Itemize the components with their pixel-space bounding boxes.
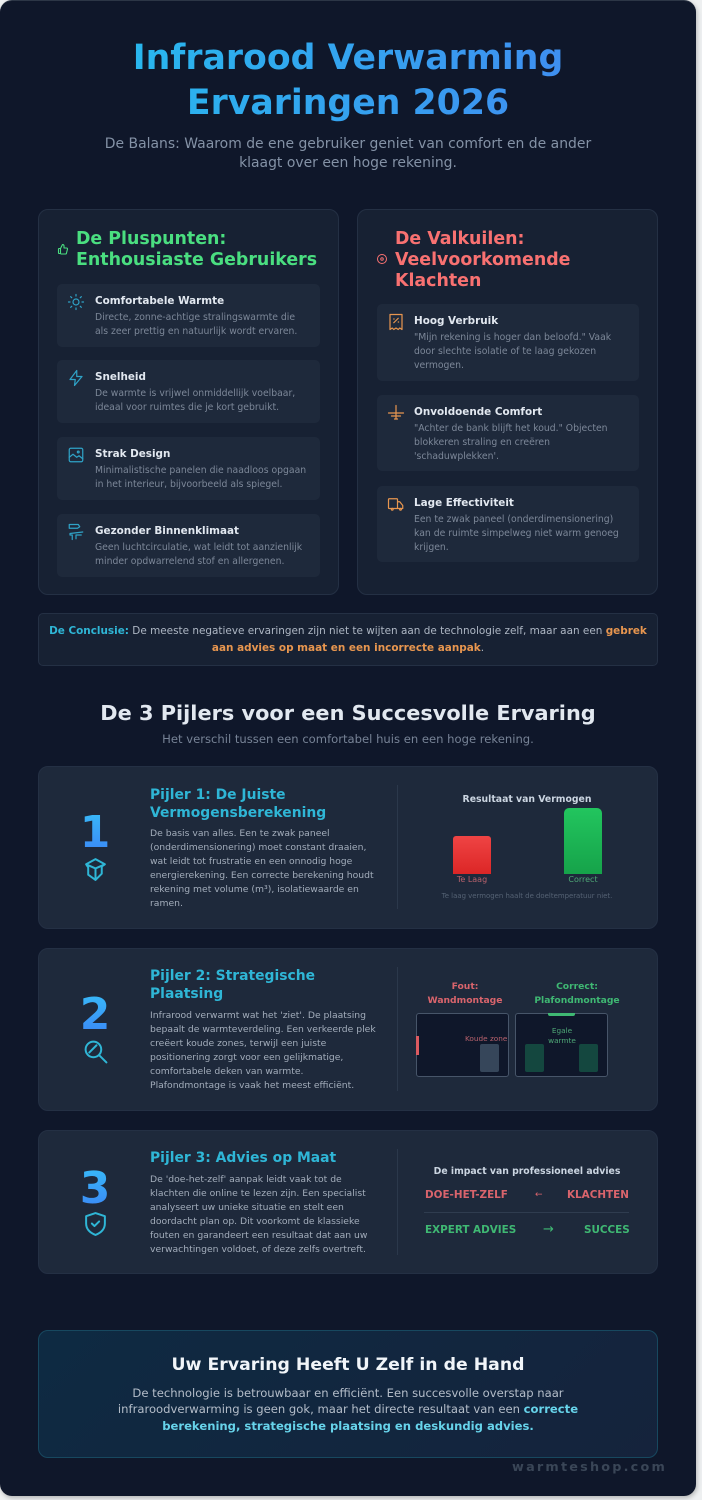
item text: "Achter de bank blijft het koud." Objecten xyxy=(414,423,608,434)
item text xyxy=(95,388,295,413)
item title: Lage Effectiviteit xyxy=(414,497,514,509)
diagram: impact xyxy=(424,1166,630,1237)
chart caption: Te laag vermogen haalt de doeltemperatuur niet. xyxy=(442,892,612,900)
closing text: De technologie is betrouwbaar en efficiënt. Een succesvolle overstap naar xyxy=(132,1386,564,1400)
heading: valkuilen xyxy=(395,229,570,291)
pillar 1 text: energierekening. Een correcte berekening houdt xyxy=(150,870,374,881)
heading: valkuilen: Veelvoorkomende xyxy=(395,250,570,270)
item text: 'schaduwplekken'. xyxy=(414,451,499,462)
heater on ceiling xyxy=(548,1013,575,1016)
chart title: Resultaat van Vermogen xyxy=(463,794,591,805)
row: doe-het-zelf: DOE-HET-ZELF xyxy=(425,1189,508,1201)
pillar 2 text: Infrarood verwarmt wat het 'ziet'. De plaatsing xyxy=(150,1010,366,1021)
pillar 2 text: creëert koude zones, terwijl een juiste xyxy=(150,1038,326,1049)
pillar 1 title xyxy=(150,787,326,821)
item text: Een te zwak paneel (onderdimensionering) xyxy=(414,514,613,525)
item text: Geen luchtcirculatie, wat leidt tot aanzienlijk xyxy=(95,542,302,553)
furniture left xyxy=(525,1044,544,1072)
furniture xyxy=(480,1044,499,1072)
row: expert advies: EXPERT ADVIES xyxy=(425,1224,516,1236)
closing panel xyxy=(38,1330,658,1458)
item text xyxy=(414,514,619,553)
item text xyxy=(414,423,608,462)
pillar 3 title: Pijler 3: Advies op Maat xyxy=(150,1150,336,1166)
item: onvoldoende comfort xyxy=(377,395,639,471)
closing text: berekening, strategische plaatsing en deskundig advies. xyxy=(162,1419,534,1433)
icon: receipt xyxy=(389,314,403,330)
pillar 2 text: bepaalt de warmteverdeling. Een verkeerde plek xyxy=(150,1024,376,1035)
closing title: Uw Ervaring Heeft U Zelf in de Hand xyxy=(171,1355,524,1375)
pillar 1 title: Pijler 1: De Juiste xyxy=(150,787,286,803)
pillar 3 xyxy=(38,1130,658,1274)
pillar 1 xyxy=(38,766,658,929)
diagram: plaatsing xyxy=(416,981,620,1077)
item text xyxy=(414,332,611,371)
pillar 1 text: wat leidt tot frustratie en een onnodig hoge xyxy=(150,856,352,867)
title: Ervaringen 2026 xyxy=(187,83,509,123)
icon: lightning xyxy=(69,370,83,386)
item: strak design xyxy=(57,437,320,500)
pillar 3 text: fouten en garandeert een resultaat dat aan uw xyxy=(150,1230,367,1241)
label: egale warmte: warmte xyxy=(548,1036,576,1045)
item text xyxy=(95,542,302,567)
icon: thumbs up xyxy=(58,244,68,254)
label: fout: Fout: xyxy=(452,981,478,992)
item title: Comfortabele Warmte xyxy=(95,295,224,307)
item text: ideaal voor ruimtes die je kort gebruikt. xyxy=(95,402,279,413)
pillar 1 text: (onderdimensionering) moet constant draaien, xyxy=(150,842,366,853)
heading: pluspunten: De Pluspunten: xyxy=(76,229,226,249)
icon: shield xyxy=(85,1212,106,1236)
pillar 1 text xyxy=(150,828,374,909)
icon: picture xyxy=(68,448,84,462)
item text: in het interieur, bijvoorbeeld als spiegel. xyxy=(95,479,282,490)
pillar 3 text: doordacht plan op. Dit voorkomt de klassieke xyxy=(150,1216,360,1227)
item text: door slechte isolatie of te laag gekozen xyxy=(414,346,596,357)
subtitle xyxy=(105,136,592,170)
label: correct: Plafondmontage xyxy=(534,995,620,1006)
item text: blokkeren straling en creëren xyxy=(414,437,550,448)
pillar 3 text: De 'doe-het-zelf' aanpak leidt vaak tot de xyxy=(150,1174,342,1185)
chart: resultaat van vermogen xyxy=(442,794,612,900)
title xyxy=(48,36,648,126)
item: lage effectiviteit xyxy=(377,486,639,562)
pillar 1 text: rekening met volume (m³), isolatiewaarde en xyxy=(150,884,359,895)
item text: krijgen. xyxy=(414,542,449,553)
closing text xyxy=(118,1386,578,1433)
pillar 1 text: De basis van alles. Een te zwak paneel xyxy=(150,828,330,839)
pillar 2 title xyxy=(150,968,315,1002)
bar: te laag xyxy=(453,836,491,874)
pillar 2 text: Plafondmontage is vaak het meest efficiënt. xyxy=(150,1080,354,1091)
item text: als zeer prettig en natuurlijk wordt ervaren. xyxy=(95,326,297,337)
item: hoog verbruik xyxy=(377,304,639,381)
pillar 2 title: Plaatsing xyxy=(150,986,223,1002)
pillar 1 text: ramen. xyxy=(150,898,183,909)
item title: Hoog Verbruik xyxy=(414,315,498,327)
icon: grounded heat xyxy=(388,404,404,420)
room: wandmontage xyxy=(416,1013,509,1077)
number 3 xyxy=(65,1164,125,1214)
label: correct: Correct xyxy=(568,875,598,884)
heading: valkuilen: De Valkuilen: xyxy=(395,229,524,249)
callout: conclusie xyxy=(38,613,658,666)
icon: search xyxy=(84,1040,108,1064)
subtitle: De Balans: Waarom de ene gebruiker geniet van comfort en de ander xyxy=(105,136,591,152)
pillar 2 xyxy=(38,948,658,1111)
item: comfortabele warmte xyxy=(57,284,320,347)
item title: Strak Design xyxy=(95,448,170,460)
item text: minder opdwarrelend stof en allergenen. xyxy=(95,556,284,567)
panel: pluspunten xyxy=(38,209,339,595)
item text: Minimalistische panelen die naadloos opgaan xyxy=(95,465,306,476)
pillar 3 text xyxy=(150,1174,367,1255)
icon: target xyxy=(377,254,387,264)
pillar 3 text: analyseert uw unieke situatie en stelt een xyxy=(150,1202,344,1213)
item text xyxy=(95,312,297,337)
label: fout xyxy=(428,981,502,1006)
diagram title: De impact van professioneel advies xyxy=(434,1166,620,1177)
pillar 2 text: comfortabele deken van warmte. xyxy=(150,1066,303,1077)
label: te laag: Te Laag xyxy=(457,875,487,884)
pillar 2 text xyxy=(150,1010,376,1091)
item text: vermogen. xyxy=(414,360,464,371)
row: klachten: KLACHTEN xyxy=(567,1189,629,1201)
number 1: 1 xyxy=(80,807,110,858)
number 2: 2 xyxy=(80,989,110,1040)
callout: conclusie: aan advies op maat en een incorrecte aanpak. xyxy=(212,642,484,654)
furniture right xyxy=(579,1044,598,1072)
pillar 3 text: verwachtingen voldoet, of deze zelfs overtreft. xyxy=(150,1244,366,1255)
pillar 3 text: klachten die online te lezen zijn. Een specialist xyxy=(150,1188,366,1199)
callout: conclusie: De Conclusie: De meeste negatieve ervaringen zijn niet te wijten aan de technologie zelf, maar aan een gebrek xyxy=(49,625,647,637)
item text xyxy=(95,465,306,490)
label: fout: Wandmontage xyxy=(428,995,502,1006)
title: Infrarood Verwarming xyxy=(133,38,563,78)
item text: kan de ruimte simpelweg niet warm genoeg xyxy=(414,528,619,539)
item title: Snelheid xyxy=(95,371,146,383)
heading: valkuilen: Klachten xyxy=(395,271,481,291)
label: egale warmte: Egale xyxy=(552,1026,572,1035)
closing text: infraroodverwarming is geen gok, maar het directe resultaat van een correcte xyxy=(118,1402,578,1416)
label: correct xyxy=(534,981,620,1006)
pillar 2 title: Pijler 2: Strategische xyxy=(150,968,315,984)
room: plafondmontage xyxy=(515,1013,608,1077)
arrow right: → xyxy=(543,1222,554,1237)
subtitle: klaagt over een hoge rekening. xyxy=(239,154,457,170)
panel: valkuilen xyxy=(357,209,658,595)
item text: "Mijn rekening is hoger dan beloofd." Vaak xyxy=(414,332,611,343)
row: succes: SUCCES xyxy=(584,1224,630,1236)
section heading: De 3 Pijlers voor een Succesvolle Ervaring xyxy=(100,701,596,725)
label: correct: Correct: xyxy=(556,981,598,992)
item: snelheid xyxy=(57,360,320,423)
number 1 xyxy=(65,808,125,858)
section subheading: Het verschil tussen een comfortabel huis en een hoge rekening. xyxy=(162,732,534,746)
icon: sun xyxy=(68,294,84,310)
item title: Gezonder Binnenklimaat xyxy=(95,525,239,537)
pillar 2 text: positionering zorgt voor een gelijkmatige, xyxy=(150,1052,343,1063)
arrow left: ← xyxy=(535,1190,543,1200)
bar: correct xyxy=(564,808,602,874)
label: koude zone: Koude zone xyxy=(465,1034,507,1043)
heater on wall xyxy=(416,1036,419,1055)
label: egale warmte xyxy=(548,1026,576,1045)
watermark: warmteshop.com xyxy=(512,1460,667,1475)
heading: pluspunten xyxy=(76,229,317,270)
number 2 xyxy=(65,990,125,1040)
item text: De warmte is vrijwel onmiddellijk voelbaar, xyxy=(95,388,295,399)
heading: pluspunten: Enthousiaste Gebruikers xyxy=(76,250,317,270)
item text: Directe, zonne-achtige stralingswarmte die xyxy=(95,312,295,323)
item: gezonder binnenklimaat xyxy=(57,514,320,577)
icon: box xyxy=(85,858,106,881)
icon: truck xyxy=(388,498,404,511)
pillar 1 title: Vermogensberekening xyxy=(150,805,326,821)
icon: wind xyxy=(68,524,84,540)
item title: Onvoldoende Comfort xyxy=(414,406,542,418)
number 3: 3 xyxy=(80,1163,110,1214)
